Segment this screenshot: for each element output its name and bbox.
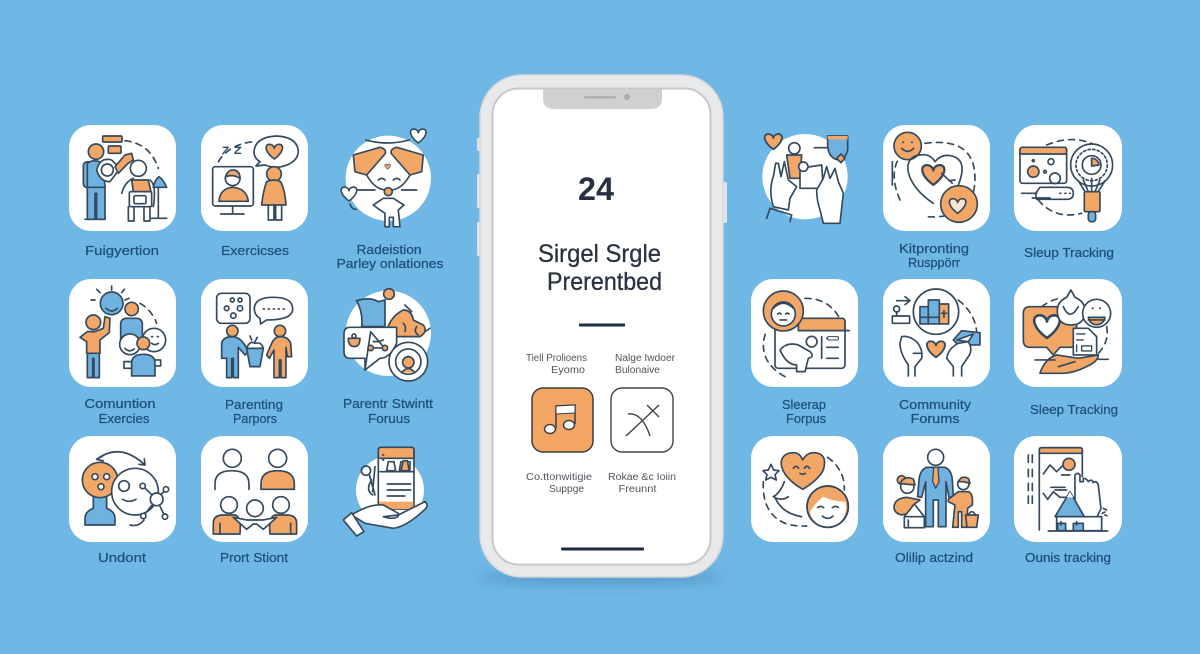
label line two: Parley onlationes <box>336 256 444 271</box>
panel: Exercicses <box>201 125 308 258</box>
label: Kitpronting <box>899 241 969 256</box>
label: Community <box>899 397 972 412</box>
number 24: 24 <box>578 171 614 207</box>
icon: hands holding baby <box>762 134 848 223</box>
icon: baby and forum <box>344 289 431 381</box>
panel: Sleep Tracking <box>1014 279 1122 417</box>
phone screen <box>492 88 710 564</box>
label line two: Foruus <box>368 411 411 426</box>
phone labels bottom: Co.ttonwitigie <box>526 472 592 483</box>
phone title: Prerentbed <box>547 268 662 296</box>
panel: Olilip actzind <box>883 436 990 565</box>
phone labels bottom <box>526 472 676 495</box>
panel: Community Forums <box>883 279 990 426</box>
icon: music note button <box>532 388 593 452</box>
icon: community hands <box>892 289 980 376</box>
home bar <box>561 548 644 550</box>
label: Sleerap <box>782 397 826 412</box>
icon: family <box>894 449 978 528</box>
label: Sleep Tracking <box>1030 402 1118 417</box>
label line two: Parpors <box>233 411 277 426</box>
phone shadow <box>476 572 726 584</box>
icon: hands over baby <box>341 129 431 227</box>
label line two: Rusppörr <box>908 255 961 270</box>
panel: Fuigyertion <box>69 125 176 258</box>
label: Ounis tracking <box>1025 550 1111 565</box>
phone <box>476 75 727 584</box>
label: Radeistion <box>356 242 422 257</box>
label: Exercicses <box>221 243 290 258</box>
panel: baby in hands <box>762 134 848 223</box>
panel: Undont <box>69 436 176 565</box>
phone labels bottom: Suppge <box>549 484 584 495</box>
panel: Parenting Parpors <box>201 279 308 426</box>
icon: heart message on hand <box>1023 290 1111 373</box>
panel: Sleerap Forpus <box>751 279 858 426</box>
label: Prort Stiont <box>220 550 288 565</box>
phone labels bottom: Rokae &c Ioiin <box>608 472 676 483</box>
label: Parentr Stwintt <box>343 396 433 411</box>
phone labels top: Tiell Prolioens <box>526 353 587 364</box>
phone labels top: Eyomo <box>551 365 585 376</box>
icon: parent and child <box>83 136 167 221</box>
phone title: Sirgel Srgle <box>538 240 661 268</box>
label: Sleup Tracking <box>1024 245 1114 260</box>
panel: Comuntion Exercies <box>69 279 176 426</box>
panel: Ounis tracking <box>1014 436 1122 565</box>
notch <box>543 89 662 109</box>
icon: heart and smile <box>892 132 977 222</box>
panel: Prort Stiont <box>201 436 308 565</box>
icon: heart and child face <box>763 453 848 527</box>
icon: phone in hand <box>343 447 427 536</box>
phone labels top <box>526 353 676 376</box>
panel: Parentr Stwintt Foruus <box>343 289 433 426</box>
icon: parents talking <box>217 293 293 378</box>
icon: two faces and network <box>82 452 169 526</box>
panel: Kitpronting Rusppörr <box>883 125 990 270</box>
phone body <box>480 75 723 577</box>
icon: people and faces <box>80 286 166 378</box>
phone labels bottom: Freunnt <box>618 484 657 495</box>
icon: phone with house <box>1028 448 1108 531</box>
panel: Sleup Tracking <box>1014 125 1122 260</box>
label: Parenting <box>225 397 283 412</box>
icon: group of people <box>213 449 297 534</box>
icon: baby profile <box>763 291 849 377</box>
panel: Radeistion Parley onlationes <box>336 129 444 271</box>
phone title <box>538 240 662 296</box>
panel: hand holding phone <box>343 447 427 536</box>
label: Comuntion <box>84 396 156 411</box>
speaker and camera <box>584 94 630 100</box>
divider <box>579 324 625 326</box>
label line two: Forpus <box>786 411 826 426</box>
label: Olilip actzind <box>895 550 973 565</box>
label line two: Exercies <box>98 411 150 426</box>
icon: video call <box>213 136 298 220</box>
label: Fuigyertion <box>85 243 159 258</box>
label line two: Forums <box>910 411 960 426</box>
icon: crossed arrows button <box>611 388 673 452</box>
phone labels top: Nalge Iwdoer <box>615 353 676 364</box>
side buttons <box>477 138 727 256</box>
icon: sleep dashboard <box>1020 140 1113 222</box>
panel: sleeping face <box>751 436 858 542</box>
label: Undont <box>98 550 146 565</box>
phone labels top: Bulonaive <box>615 365 660 376</box>
